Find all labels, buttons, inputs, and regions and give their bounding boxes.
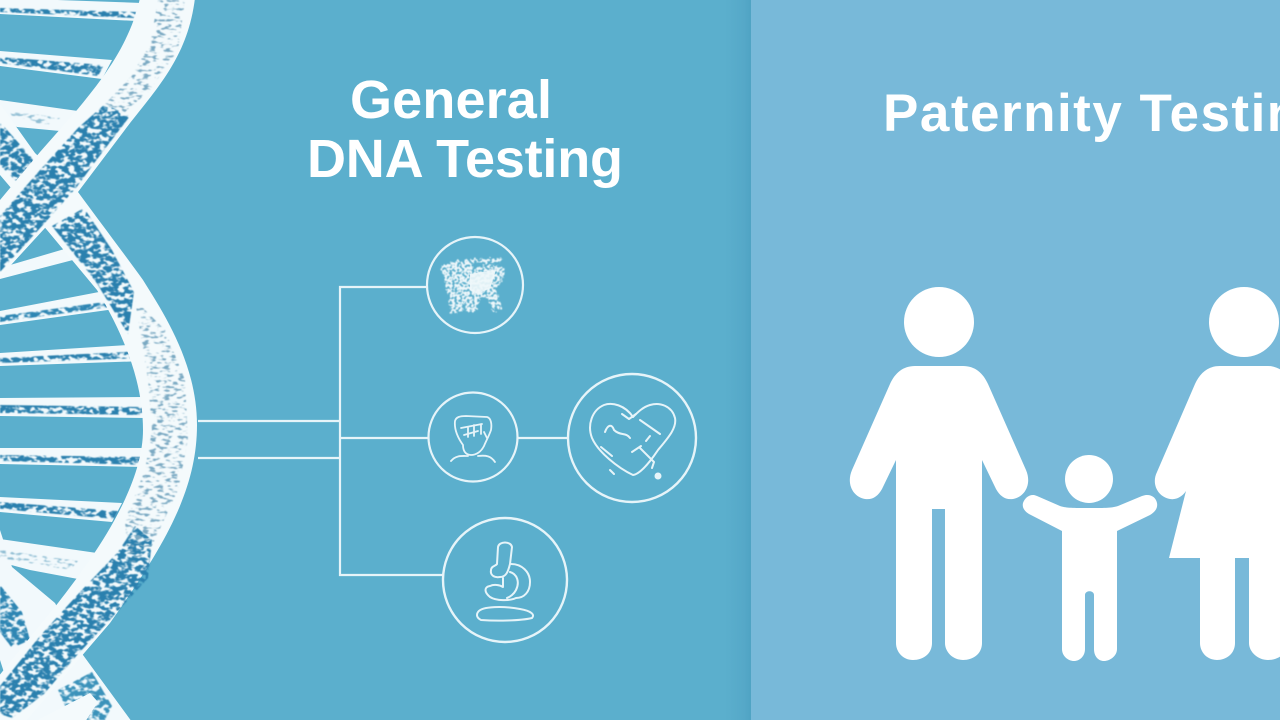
panel: paternity testing background [751,0,1280,720]
DNA double helix [0,0,197,720]
lower dark section [0,104,130,272]
panel: general DNA testing background [0,0,751,720]
light flecks on the bulge [125,300,188,570]
icon: world map [427,237,523,333]
icon: face with DNA pattern [428,392,518,482]
icon: heart with broken DNA lines [568,374,696,502]
figure: child [1023,455,1157,661]
connector lines from helix to icons [198,287,568,575]
icon: microscope [443,518,567,642]
upper left dark section [0,122,45,195]
back strand lower left [0,530,132,720]
DNA rungs [0,0,146,579]
panel divider shadow [725,0,751,720]
title: General DNA Testing [307,70,623,189]
light flecks at the top [105,0,185,112]
front strand running down and to the left [0,0,195,277]
title: General DNA Testing: General [350,70,552,130]
front strand running down and to the right [0,104,197,720]
title: General DNA Testing: DNA Testing [307,129,623,189]
figure: mother [1155,287,1280,660]
figure: father [850,287,1028,660]
upper right dark section [52,208,134,334]
bottom rung [34,693,98,720]
family figures [850,287,1280,661]
lower dark section [0,526,152,718]
